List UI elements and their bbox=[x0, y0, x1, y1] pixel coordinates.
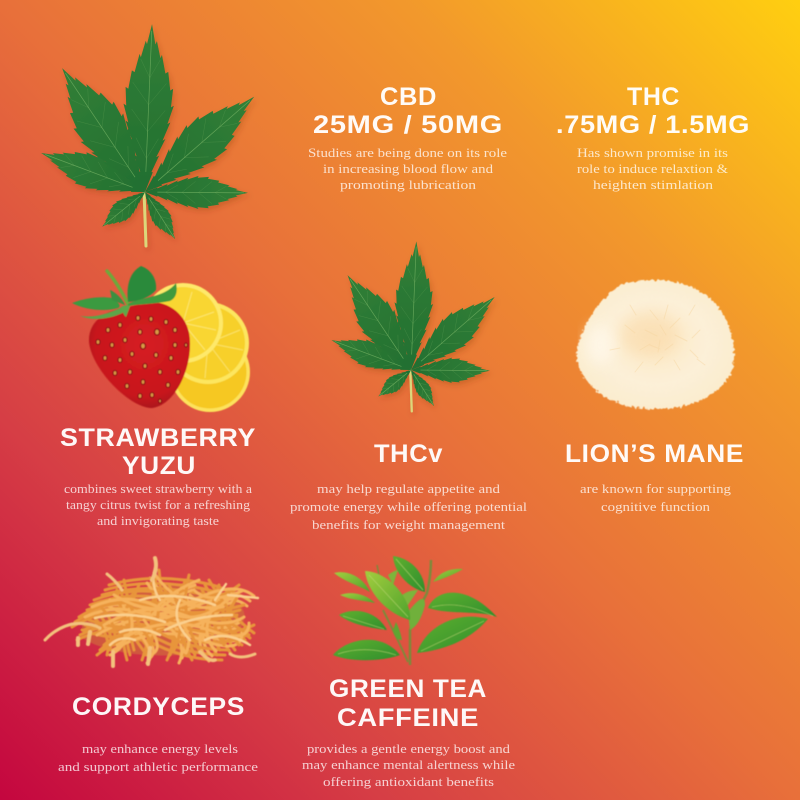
heading and text: Green Tea Caffeine: GREEN TEA bbox=[329, 675, 487, 703]
icon: cordyceps pile bbox=[45, 558, 258, 666]
heading and text: THCv bbox=[290, 440, 527, 532]
heading and text: CBD: in increasing blood flow and bbox=[323, 161, 494, 176]
heading and text: THC: .75MG / 1.5MG bbox=[556, 111, 750, 139]
heading and text: Green Tea Caffeine: provides a gentle energy boost and bbox=[307, 741, 511, 756]
heading and text: CBD bbox=[308, 83, 507, 192]
heading and text: Cordyceps: may enhance energy levels bbox=[82, 741, 238, 756]
heading and text: Strawberry Yuzu: YUZU bbox=[122, 452, 196, 480]
icon: cannabis leaf large bbox=[35, 23, 269, 246]
heading and text: CBD: 25MG / 50MG bbox=[313, 111, 503, 139]
heading and text: Strawberry Yuzu: combines sweet strawberry with a bbox=[64, 481, 252, 496]
heading and text: THCv: THCv bbox=[374, 440, 443, 468]
heading and text: Green Tea Caffeine: CAFFEINE bbox=[337, 704, 479, 732]
heading and text: THCv: benefits for weight management bbox=[312, 517, 505, 532]
heading and text: Cordyceps: and support athletic performance bbox=[58, 759, 258, 774]
heading and text: THCv: promote energy while offering potential bbox=[290, 499, 527, 514]
heading and text: THC: THC bbox=[627, 83, 680, 111]
heading and text: THC: heighten stimlation bbox=[593, 177, 714, 192]
heading and text: Lion's Mane: LION’S MANE bbox=[565, 440, 744, 468]
heading and text: Green Tea Caffeine bbox=[302, 675, 515, 789]
icon: cannabis leaf small bbox=[327, 241, 506, 411]
heading and text: Lion's Mane: are known for supporting bbox=[580, 481, 732, 496]
heading and text: Cordyceps bbox=[58, 693, 258, 774]
heading and text: THC bbox=[556, 83, 750, 192]
icon: lion's mane mushroom bbox=[577, 280, 734, 409]
heading and text: Lion's Mane bbox=[565, 440, 744, 514]
icon: green tea sprig bbox=[333, 556, 497, 665]
heading and text: THC: Has shown promise in its bbox=[577, 145, 728, 160]
heading and text: THCv: may help regulate appetite and bbox=[317, 481, 501, 496]
heading and text: CBD: Studies are being done on its role bbox=[308, 145, 507, 160]
heading and text: Green Tea Caffeine: offering antioxidant benefits bbox=[323, 774, 494, 789]
heading and text: THC: role to induce relaxtion & bbox=[577, 161, 728, 176]
heading and text: Strawberry Yuzu bbox=[60, 424, 256, 528]
heading and text: Strawberry Yuzu: tangy citrus twist for a refreshing bbox=[66, 497, 251, 512]
heading and text: Strawberry Yuzu: STRAWBERRY bbox=[60, 424, 256, 452]
heading and text: CBD: CBD bbox=[380, 83, 437, 111]
icon: strawberry and yuzu slices bbox=[72, 266, 250, 412]
heading and text: CBD: promoting lubrication bbox=[340, 177, 477, 192]
heading and text: Green Tea Caffeine: may enhance mental alertness while bbox=[302, 757, 515, 772]
heading and text: Strawberry Yuzu: and invigorating taste bbox=[97, 513, 219, 528]
heading and text: Lion's Mane: cognitive function bbox=[601, 499, 711, 514]
heading and text: Cordyceps: CORDYCEPS bbox=[72, 693, 245, 721]
